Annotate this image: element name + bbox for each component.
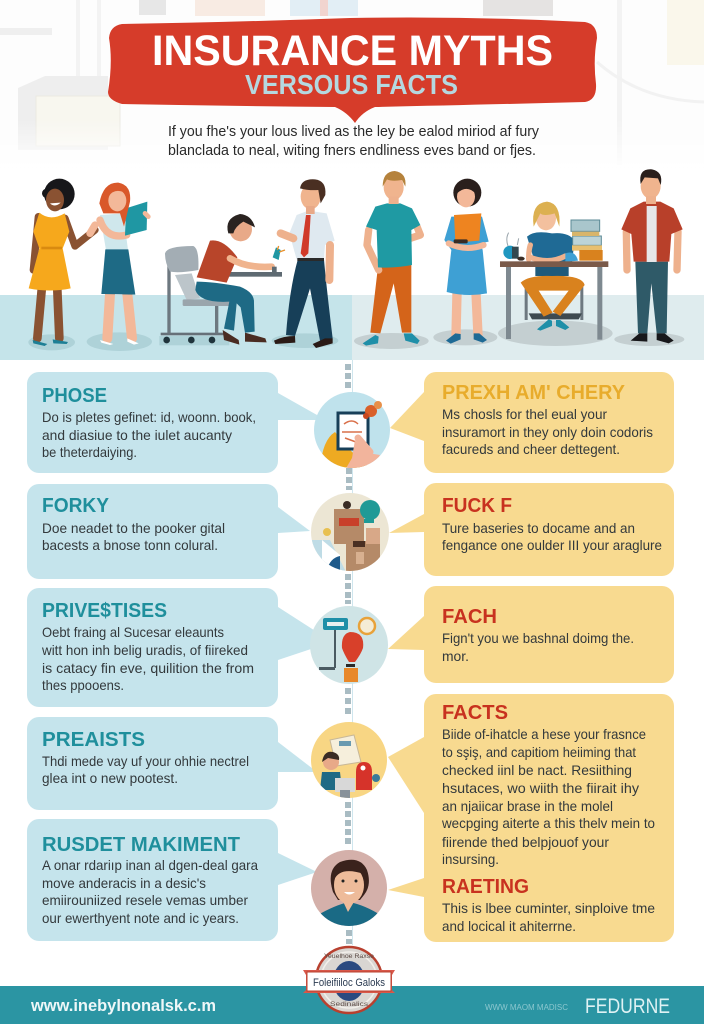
fact card 1: Ms chosls for thel eual your <box>442 406 607 422</box>
seated man at desk <box>159 214 285 345</box>
standing man with tie <box>272 179 338 348</box>
fact card 4: FACTS <box>442 702 508 724</box>
woman in orange dress <box>28 179 95 350</box>
rating body: This is lbee cuminter, sinploive tme <box>442 900 655 916</box>
card background and pointer <box>278 393 317 420</box>
fact card 4: checked iinl be nact. Resiithing <box>442 762 632 778</box>
icon: hand on tablet <box>314 392 390 470</box>
intro text: If you fhe's your lous lived as the ley be ealod miriod af fury <box>168 123 539 140</box>
icon: lightbulb <box>310 606 388 684</box>
fact card 4: insursing. <box>442 851 499 867</box>
man in red shirt <box>614 169 684 346</box>
myth card 5: our ewerthyent note and ic years. <box>42 910 239 926</box>
rating body <box>442 900 655 934</box>
myth card 4 <box>27 717 317 810</box>
myth card 2 <box>27 484 310 579</box>
card heading: PHOSE <box>42 385 107 407</box>
myth card 2: bacests a bnose tonn colural. <box>42 537 218 553</box>
fact card 4: fiirende thed belpjouof your <box>442 834 609 850</box>
fact card 4: hsutaces, wo wiith the fiirait ihy <box>442 780 639 796</box>
card body: and diasiue to the iulet aucanty <box>42 427 232 443</box>
myth card 3: witt hon inh belig uradis, of fiireked <box>41 642 248 658</box>
myth card 2: Doe neadet to the pooker gital <box>42 520 225 536</box>
myth card 5 <box>27 819 317 941</box>
fact card 3 <box>388 586 674 683</box>
fact card 2: fengance one oulder III your araglure <box>442 537 662 553</box>
icon: smiling portrait <box>311 850 387 930</box>
icon: person with report <box>311 722 387 798</box>
woman in blue dress <box>433 179 497 345</box>
fact card 4: an njaiicar brase in the molel <box>442 798 613 814</box>
myth card 3: is catacy fin eve, quilition the from <box>42 660 254 676</box>
myth card 1 <box>27 372 317 473</box>
fact card 1: facureds and cheer dettegent. <box>442 441 620 457</box>
icon: packages <box>311 493 389 573</box>
fact card 2: Ture baseries to docame and an <box>442 520 635 536</box>
myth card 5: A onar rdariıp inan al dgen-deal gara <box>42 857 258 873</box>
illustration: people left <box>28 179 338 351</box>
woman with folder <box>87 183 152 351</box>
myth card 3: thes ppooens. <box>42 677 124 693</box>
fact card 1: PREXH AM' CHERY <box>442 382 626 404</box>
footer bar <box>0 986 704 1024</box>
fact card 3: FACH <box>442 606 497 628</box>
fact card 2: FUCK F <box>442 495 512 517</box>
myth card 5: move anderacis in a desic's <box>42 875 206 891</box>
fact card 3: Fign't you we bashnal doimg the. <box>442 630 634 646</box>
title banner <box>108 18 597 123</box>
myth card 3: PRIVE$TISES <box>42 600 167 622</box>
footer url: www.inebylnonalsk.c.m <box>30 996 216 1015</box>
card body <box>42 409 256 460</box>
rating heading: RAETING <box>442 876 529 898</box>
fact card 1: insuramort in they only doin codoris <box>442 424 653 440</box>
card body: Do is pletes gefinet: id, woonn. book, <box>42 409 256 425</box>
fact card 3: mor. <box>442 648 469 664</box>
myth card 4: Thdi mede vay uf your ohhie nectrel <box>42 753 249 769</box>
myth card 3: Oebt fraing al Sucesar eleaunts <box>42 624 224 640</box>
myth card 4: PREAISTS <box>42 729 145 751</box>
myth card 2: FORKY <box>42 495 110 517</box>
man in teal shirt <box>354 171 429 349</box>
myth card 5: RUSDET MAKIMENT <box>42 834 240 856</box>
rating body: and locical it ahiterrne. <box>442 918 576 934</box>
badge bottom text: Sedinalics <box>330 1002 368 1008</box>
badge <box>303 947 395 1013</box>
fact card 4: to sşiş, and capitiom heiiming that <box>442 744 636 760</box>
myth card 5: emiirouniized resele vemas umber <box>42 892 248 908</box>
fact card 4: wecpging aiterte a this thelv mein to <box>441 815 655 831</box>
floor band <box>0 295 704 360</box>
fact card 4: Biide of-ihatcle a hese your frasnce <box>442 726 646 742</box>
footer brand: FEDURNE <box>585 995 670 1018</box>
fact card 2 <box>389 483 674 576</box>
banner shape <box>108 18 597 123</box>
title line 1: INSURANCE MYTHS <box>152 27 553 75</box>
fact card 4 <box>388 694 674 942</box>
myth card 3 <box>27 588 320 707</box>
central timeline <box>345 360 353 945</box>
ribbon <box>303 970 395 993</box>
woman at desk with books <box>498 202 613 346</box>
illustration: people right <box>354 169 684 349</box>
footer small text: WWW MAOM MADISC <box>485 1003 568 1012</box>
card body: be theterdaiying. <box>42 444 137 460</box>
title line 2: VERSOUS FACTS <box>245 69 458 100</box>
intro text <box>168 123 539 159</box>
faded office background <box>0 0 704 170</box>
intro text: blanclada to neal, witing fners endliness eves band or fjes. <box>168 142 536 159</box>
fact card 1 <box>390 372 674 473</box>
myth card 4: glea int o new pootest. <box>42 770 178 786</box>
ribbon label: Foleifiiloc Galoks <box>313 977 385 989</box>
badge top text: Yeuelhoe Raxse <box>324 954 375 960</box>
